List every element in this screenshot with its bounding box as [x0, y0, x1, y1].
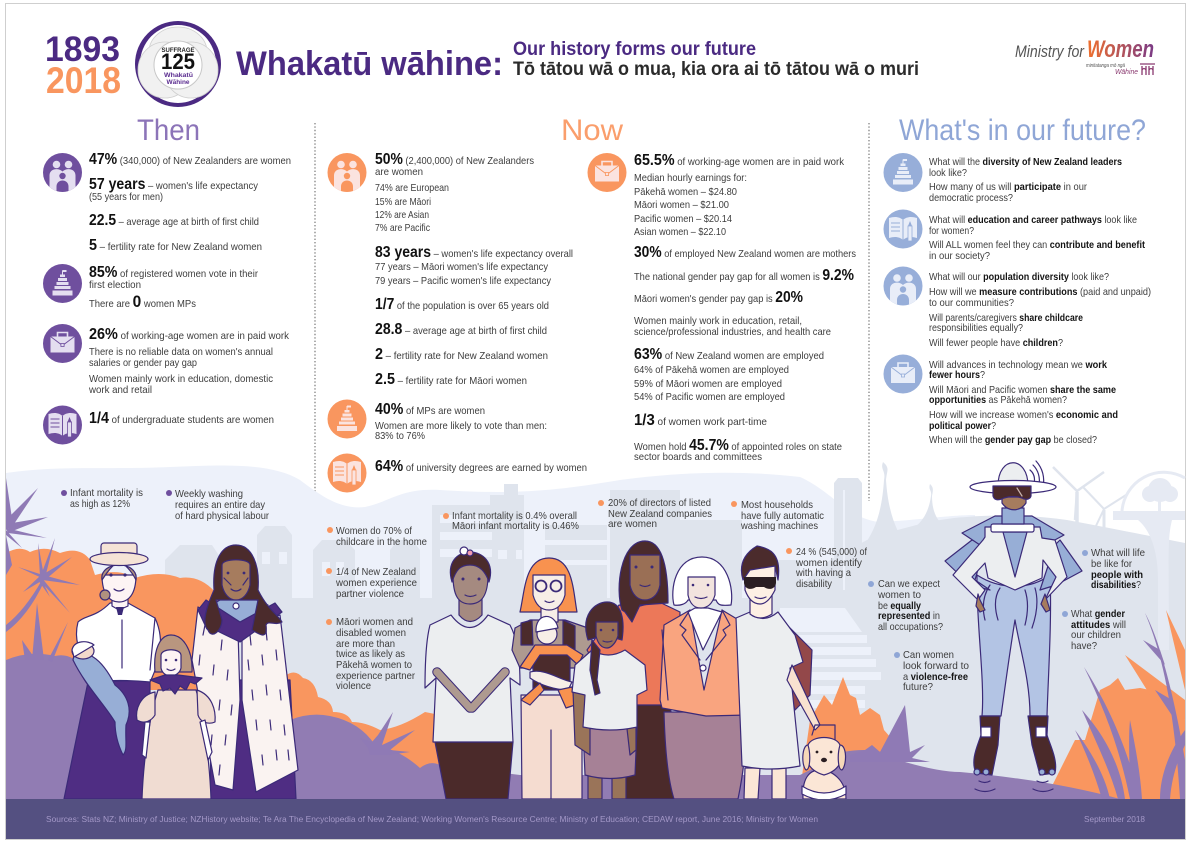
- callouts: Future: be equally: [878, 601, 921, 612]
- callouts: Future: What will life: [1091, 548, 1145, 559]
- callouts: Now, centre: washing machines: [740, 521, 818, 532]
- panel: Now text column 1: 79 years – Pacific women's life expectancy: [375, 276, 552, 287]
- panel: Now text column 1: 83 years – women's life expectancy overall: [375, 244, 573, 261]
- panel: Then text: 5 – fertility rate for New Zealand women: [89, 237, 262, 254]
- panel: Now text column 1: 7% are Pacific: [375, 223, 430, 234]
- panel: Future text: in our society?: [929, 251, 990, 262]
- panel: Future icons: [884, 153, 922, 394]
- callouts: Future: Can women: [903, 650, 954, 661]
- logo: Ministry for Women: Women: [1087, 36, 1154, 63]
- shrubs: orange left: [6, 549, 240, 690]
- callouts: Now, left: Women do 70% of: [336, 526, 412, 537]
- panel: Future text: fewer hours?: [929, 370, 985, 381]
- domed tree habitat: [1113, 472, 1185, 650]
- badge: Suffrage 125: [135, 21, 221, 107]
- panel: Then text: Women mainly work in education, domestic: [89, 374, 273, 385]
- panel: Then text: first election: [89, 280, 141, 291]
- callouts: Now, centre: Most households: [741, 500, 813, 511]
- panel: Now text column 2: 54% of Pacific women are employed: [634, 392, 785, 403]
- panel: Future text: When will the gender pay gap be closed?: [929, 435, 1097, 446]
- panel: Now text column 2: Women hold 45.7% of appointed roles on state: [634, 437, 842, 454]
- scene backdrop: stepped building: [780, 608, 881, 708]
- panel: Then text: 85% of registered women vote in their: [89, 264, 258, 281]
- scene backdrop: hills: [6, 465, 1185, 799]
- panel: Now text column 2: 63% of New Zealand women are employed: [634, 346, 824, 363]
- callouts: Now, left: women experience: [335, 578, 417, 589]
- callouts: Future: people with: [1091, 570, 1143, 581]
- panel: Now text column 1: 15% are Māori: [375, 197, 431, 208]
- panel: Future text: How many of us will participate in our: [929, 182, 1087, 193]
- hills: purple foreground: [6, 654, 1120, 799]
- badge: Suffrage 125: Wāhine: [166, 79, 190, 86]
- panel: Future text: [929, 157, 1151, 446]
- icon: parliament vote: [884, 153, 922, 192]
- panel: Now text column 1: 2.5 – fertility rate for Māori women: [375, 371, 527, 388]
- panel: Future text: Will advances in technology mean we work: [929, 360, 1107, 371]
- callouts: Now, centre: 24 % (545,000) of: [796, 547, 867, 558]
- callouts: Now, left: experience partner: [336, 671, 415, 682]
- panel: Then text: salaries or gender pay gap: [89, 358, 197, 369]
- callouts: Future: What gender: [1071, 609, 1125, 620]
- panel: Now text column 1: Women are more likely to vote than men:: [375, 421, 547, 432]
- callouts: Now, left: violence: [336, 681, 371, 692]
- logo: Ministry for Women: [1015, 36, 1155, 76]
- column dividers: [315, 123, 869, 501]
- panel: Future text: political power?: [929, 421, 996, 432]
- panel: Now text column 2: 64% of Pākehā women are employed: [634, 365, 789, 376]
- shrubs: orange middle-left: [285, 672, 440, 790]
- callouts: Future: be like for: [1091, 559, 1132, 570]
- panel: Now text column 2: [634, 152, 856, 463]
- figure: Victorian girl: [137, 635, 215, 799]
- panel: Now text column 1: are women: [375, 167, 423, 178]
- panel: Now text column 2: Pākehā women – $24.80: [634, 187, 737, 198]
- header: years: [45, 30, 121, 101]
- panel: Now text column 1: 50% (2,400,000) of New Zealanders: [375, 151, 534, 168]
- callouts: Now, centre: 20% of directors of listed: [608, 498, 711, 509]
- panel: Future text: What will our population diversity look like?: [929, 272, 1109, 283]
- panel: Now text column 1: 40% of MPs are women: [375, 401, 485, 418]
- panel: Future text: What will education and career pathways look like: [929, 215, 1137, 226]
- panel: Now text column 2: 59% of Māori women are employed: [634, 379, 782, 390]
- callouts: Future: a violence-free: [903, 672, 968, 683]
- callouts: Now, left: are more than: [336, 639, 395, 650]
- callouts: Now, centre: New Zealand companies: [608, 509, 712, 520]
- callouts: Now, left: [326, 526, 427, 692]
- callouts: Then: Weekly washing: [175, 489, 243, 500]
- panel: Future text: How will we increase women's economic and: [929, 410, 1118, 421]
- callouts: Future: disabilities?: [1091, 580, 1141, 591]
- panel: Future text: Will parents/caregivers share childcare: [929, 313, 1083, 324]
- panel: Future text: How will we measure contributions (paid and unpaid): [929, 287, 1151, 298]
- subtitle: [513, 39, 919, 80]
- panel: Now text column 1: 74% are European: [375, 183, 449, 194]
- panel: Future text: Will Māori and Pacific women share the same: [929, 385, 1116, 396]
- panel: Then text: 1/4 of undergraduate students are women: [89, 410, 274, 427]
- figure: future woman in hat and VR goggles: [945, 461, 1082, 792]
- callouts: Now, centre: Infant mortality is 0.4% overall: [452, 511, 577, 522]
- heading: What's in our future?: What's in our future?: [899, 114, 1146, 147]
- callouts: Now, left: twice as likely as: [336, 649, 405, 660]
- panel: Future text: opportunities as Pākehā women?: [929, 395, 1067, 406]
- subtitle: Our history forms our future: [513, 39, 756, 60]
- panel: Now text column 1: 12% are Asian: [375, 210, 429, 221]
- figure: woman with sunglasses, bag and guide dog: [736, 546, 846, 800]
- panel: Now text column 2: Asian women – $22.10: [634, 227, 726, 238]
- subtitle: Tō tātou wā o mua, kia ora ai tō tātou wā o muri: [513, 59, 919, 80]
- panel: Now text column 1: 64% of university degrees are earned by women: [375, 458, 587, 475]
- header: years: 1893: [45, 30, 120, 69]
- logo: Ministry for Women: Ministry for: [1015, 42, 1085, 61]
- callouts: Future: have?: [1071, 641, 1097, 652]
- shrubs: orange centre-right: [800, 677, 897, 790]
- callouts: Then: [61, 488, 269, 522]
- panel: Then text: There is no reliable data on women's annual: [89, 347, 273, 358]
- callouts: Now, centre: disability: [796, 579, 833, 590]
- panel: Now text column 1: [375, 151, 587, 475]
- icon: parliament vote: [43, 264, 82, 303]
- panel: Then text: 26% of working-age women are in paid work: [89, 326, 290, 343]
- callouts: Future: all occupations?: [878, 622, 943, 633]
- callouts: Future: Can we expect: [878, 579, 940, 590]
- panel: Now text column 2: Median hourly earnings for:: [634, 173, 747, 184]
- icon: book: [43, 406, 82, 444]
- callouts: Future: represented in: [878, 611, 940, 622]
- callouts: Then: as high as 12%: [70, 499, 130, 510]
- icon: parliament vote: [328, 400, 366, 438]
- panel: Now text column 1: 2 – fertility rate for New Zealand women: [375, 346, 548, 363]
- header: years: 2018: [46, 60, 121, 101]
- logo: Ministry for Women: minitatanga mō ngā: [1086, 63, 1125, 69]
- panel: Then text: (55 years for men): [89, 192, 163, 203]
- panel: Now icons: [328, 153, 626, 492]
- callouts: Now, left: 1/4 of New Zealand: [336, 567, 416, 578]
- callouts: Now, centre: [443, 498, 867, 590]
- icon: briefcase: [43, 324, 82, 363]
- callouts: Now, centre: have fully automatic: [741, 511, 824, 522]
- main title: Whakatū wāhine:: [236, 45, 503, 83]
- callouts: Now, left: Pākehā women to: [336, 660, 412, 671]
- panel: Now text column 2: sector boards and committees: [634, 452, 762, 463]
- icon: book: [884, 210, 922, 248]
- callouts: Then: requires an entire day: [175, 500, 266, 511]
- scene backdrop: skyline windows: [262, 490, 845, 590]
- icon: briefcase: [884, 354, 922, 394]
- callouts: Then: of hard physical labour: [175, 511, 269, 522]
- callouts: Future: future?: [903, 682, 933, 693]
- panel: Now text column 2: 30% of employed New Zealand women are mothers: [634, 244, 856, 261]
- panel: Now text column 2: Māori women – $21.00: [634, 200, 729, 211]
- figure: Māori woman in cloak: [192, 545, 298, 799]
- logo: Ministry for Women: Wāhine: [1115, 69, 1138, 76]
- wind turbines: [1053, 467, 1126, 535]
- icon: briefcase: [588, 153, 626, 192]
- callouts: Now, centre: with having a: [795, 568, 851, 579]
- panel: Future text: for women?: [929, 226, 974, 237]
- heading: Now: Now: [561, 114, 623, 147]
- badge: Suffrage 125: Whakatū: [164, 72, 193, 79]
- shrubs: orange right: [1050, 678, 1185, 799]
- panel: Then text: There are 0 women MPs: [89, 292, 196, 311]
- panel: Now text column 2: science/professional industries, and health care: [634, 327, 831, 338]
- panel: Then icons: [43, 153, 82, 444]
- scene backdrop: past and present skyline: [165, 462, 945, 600]
- figure: Victorian mother with baby: [64, 543, 160, 799]
- panel: Now text column 2: 1/3 of women work part-time: [634, 412, 767, 429]
- figure: woman in grey top: [425, 547, 520, 799]
- plants: purple spiky fronds: [6, 478, 1185, 799]
- badge: Suffrage 125: 125: [161, 49, 195, 74]
- panel: Now text column 2: The national gender pay gap for all women is 9.2%: [634, 267, 854, 284]
- figure: tall woman in coral: [587, 541, 680, 799]
- panel: Now text column 2: Māori women's gender pay gap is 20%: [634, 289, 803, 306]
- panel: Future text: responsibilities equally?: [929, 323, 1023, 334]
- panel: Now text column 1: 83% to 76%: [375, 431, 425, 442]
- callouts: Now, left: partner violence: [336, 589, 404, 600]
- callouts: Then: Infant mortality is: [70, 488, 143, 499]
- panel: Then text: work and retail: [88, 385, 152, 396]
- callouts: Future: [868, 548, 1145, 693]
- panel: Now text column 1: 1/7 of the population is over 65 years old: [375, 296, 549, 313]
- panel: Future text: Will ALL women feel they can contribute and benefit: [929, 240, 1145, 251]
- icon: people: [884, 266, 922, 306]
- panel: Future text: What will the diversity of New Zealand leaders: [929, 157, 1122, 168]
- panel: Then text: 47% (340,000) of New Zealanders are women: [89, 151, 291, 168]
- panel: Then text: 57 years – women's life expectancy: [89, 176, 259, 193]
- callouts: Future: our children: [1071, 630, 1121, 641]
- panel: Then text: [88, 151, 291, 427]
- callouts: Future: women to: [877, 590, 921, 601]
- icon: people: [328, 153, 366, 192]
- icon: people: [43, 153, 82, 192]
- badge: Suffrage 125: SUFFRAGE: [162, 48, 194, 54]
- panel: Now text column 1: 28.8 – average age at birth of first child: [375, 321, 547, 338]
- panel: Future text: Will fewer people have children?: [929, 338, 1063, 349]
- footer bar: [6, 799, 1185, 839]
- panel: Then text: 22.5 – average age at birth of first child: [89, 212, 259, 229]
- icon: book: [328, 454, 366, 492]
- callouts: Now, centre: women identify: [795, 558, 863, 569]
- callouts: Now, left: childcare in the home: [336, 537, 427, 548]
- panel: Now text column 1: 77 years – Māori women's life expectancy: [375, 262, 549, 273]
- callouts: Now, left: Māori women and: [336, 617, 413, 628]
- callouts: Future: attitudes will: [1071, 620, 1126, 631]
- panel: Future text: to our communities?: [929, 298, 1014, 309]
- panel: Now text column 2: 65.5% of working-age women are in paid work: [634, 152, 845, 169]
- callouts: Now, centre: are women: [608, 519, 657, 530]
- footer bar: Sources: Stats NZ; Ministry of Justice; NZHistory website; Te Ara The Encyclopedia of New Zealand; Working Women's Resource Centre; Ministry of Education; CEDAW report, June 2016; Ministry for Women: [46, 814, 818, 824]
- callouts: Now, left: disabled women: [336, 628, 406, 639]
- figure: woman with glasses carrying baby: [512, 558, 592, 799]
- panel: Future text: democratic process?: [929, 193, 1013, 204]
- panel: Future text: look like?: [929, 168, 967, 179]
- figure: older woman in jacket: [660, 557, 748, 799]
- panel: Now text column 2: Women mainly work in education, retail,: [634, 316, 802, 327]
- heading: Then: Then: [137, 114, 200, 147]
- callouts: Now, centre: Māori infant mortality is 0.46%: [452, 521, 579, 532]
- footer bar: September 2018: [1084, 814, 1145, 824]
- panel: Now text column 2: Pacific women – $20.14: [634, 214, 732, 225]
- callouts: Future: look forward to: [903, 661, 969, 672]
- figure: girl: [572, 602, 647, 799]
